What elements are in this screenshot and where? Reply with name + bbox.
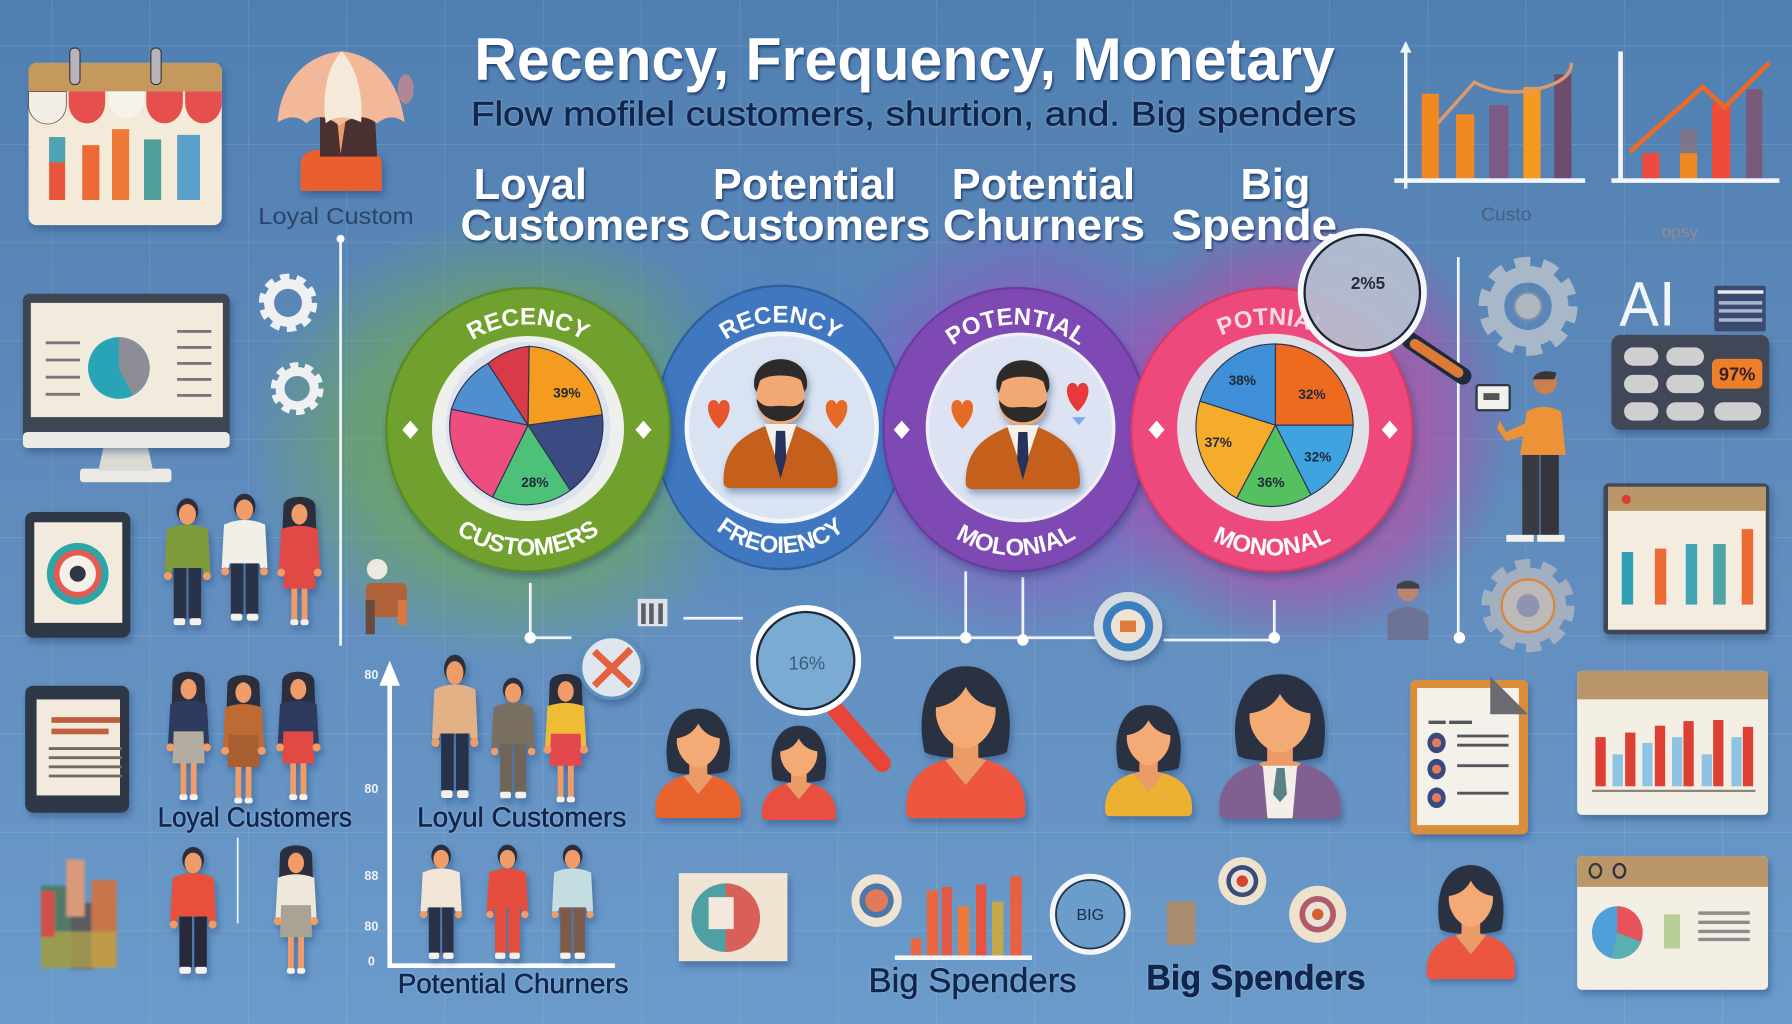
icon: clipboard checklist [1410,677,1528,834]
chart: bars with trend line one [1394,41,1585,189]
pie labels: green ring [521,386,581,490]
icon: man in suit [966,360,1080,489]
icon: tablet with target [25,512,130,638]
chart: bars with trend line two [1611,51,1779,183]
icon: gear right bottom [1487,565,1569,646]
icon: magnifier over pink ring [1301,231,1463,376]
ring: purple potential [882,286,1144,582]
ring: purple potential: POTENTIAL [944,308,1081,346]
icon: hearts [708,400,847,429]
pie labels: pink ring: 32% [1298,387,1326,402]
icon: gear right top [1485,263,1571,350]
icon: AI keypad [1611,270,1769,430]
icon: person with phone [1477,371,1566,542]
icon: calendar bar chart [29,48,222,225]
icon: gears left [262,277,320,412]
icon: brown tile [1167,902,1195,945]
icon: hearts [951,383,1089,429]
heading: potential customers: Customers [699,202,930,250]
ring: green recency: RECENCY [466,308,591,340]
people group: row three [420,845,594,959]
icon: badge centre [1094,592,1162,661]
icon: brown figure [366,559,407,634]
icon: abstract collage [41,859,117,969]
icon: AI keypad: 97% [1719,364,1755,385]
subtitle: Flow mofilel customers, shurtion, and. Big spenders [471,96,1357,134]
label: potential churners: Potential Churners [398,968,629,999]
heading: loyal customers [461,161,690,250]
pie labels: green ring: 28% [521,475,549,490]
label: big spenders two: Big Spenders [1146,958,1366,998]
icon: AI keypad: AI [1619,270,1675,340]
heading: big spenders: Spende [1171,202,1337,250]
people group: bottom left [170,845,318,974]
diamonds: green ring [402,421,651,439]
axis chart: 80 [364,782,378,796]
heading: loyal customers: Customers [461,202,690,250]
label: faded smudge: opsy [1662,222,1699,242]
icon: framed picture [679,873,787,961]
label: big spenders one: Big Spenders [869,962,1077,1000]
axis chart: 0 [368,955,375,969]
chart: bottom bars [895,877,1032,960]
icon: umbrella person [278,51,414,191]
heading: potential churners [943,161,1145,250]
heading: big spenders [1171,161,1337,250]
pie chart: green ring [450,346,603,505]
icon: magnifier centre: 16% [789,653,825,674]
icon: seal badges [1218,857,1346,943]
pie labels: green ring: 39% [553,386,581,401]
pie labels: pink ring: 36% [1257,475,1285,490]
icon: small chart tile [638,599,667,626]
heading: big spenders: Big [1240,161,1310,209]
people group: row two left [166,672,321,803]
diamonds: pink ring [1149,421,1398,439]
heading: potential churners: Potential [952,161,1135,209]
pie labels: pink ring [1205,373,1331,490]
icon: swirl badge [851,874,902,927]
axis chart: 88 [364,869,378,883]
axis chart: 80 [364,668,378,682]
axis chart [364,661,615,969]
icon: small person [1387,581,1429,640]
ring: green recency [384,286,676,580]
ring: pink monetary [1130,286,1420,580]
axis chart: 80 [364,919,378,933]
ring: pink monetary: MONONAL [1214,526,1331,556]
icon: window pie chart [1577,856,1768,990]
heading: potential churners: Churners [943,202,1145,250]
pie labels: pink ring: 38% [1229,373,1256,388]
icon: magnifier centre [753,608,882,763]
ring: blue frequency [662,284,896,570]
pie labels: pink ring: 37% [1205,435,1232,450]
label: loyal customers left: Loyal Customers [158,801,352,832]
label: loyal custom: Loyal Custom [258,203,414,229]
heading: loyal customers: Loyal [474,161,587,209]
people: women busts [655,666,1341,820]
ring: blue frequency: FREOIENCY [717,516,840,554]
icon: man in suit [723,359,838,488]
icon: document tablet [25,686,129,813]
icon: window bar chart top right [1603,483,1769,634]
heading: potential customers [699,161,930,250]
icon: big lens: BIG [1077,907,1104,924]
ring: purple potential: MOLONIAL [956,524,1076,556]
icon: woman bottom right [1427,865,1515,979]
heading: potential customers: Potential [713,161,896,209]
people group: row two right [431,655,588,802]
pie chart: pink ring [1196,344,1353,507]
connector lines [238,235,1465,923]
people group: row one [164,494,322,625]
diamonds: purple ring [894,421,1165,439]
ring: green recency: CUSTOMERS [460,521,598,556]
icon: red cross badge [581,637,642,698]
label: loyul customers: Loyul Customers [417,801,626,832]
ring: blue frequency: RECENCY [718,306,844,340]
pie labels: pink ring: 32% [1304,450,1331,465]
icon: big lens [1053,877,1128,952]
icon: monitor with pie [23,294,230,482]
ring: pink monetary: POTNIAL [1216,308,1323,335]
label: faded custo: Custo [1481,204,1531,225]
icon: magnifier over pink ring: 2%5 [1351,273,1386,293]
title: Recency, Frequency, Monetary [474,25,1335,93]
icon: window bar chart [1577,671,1768,815]
